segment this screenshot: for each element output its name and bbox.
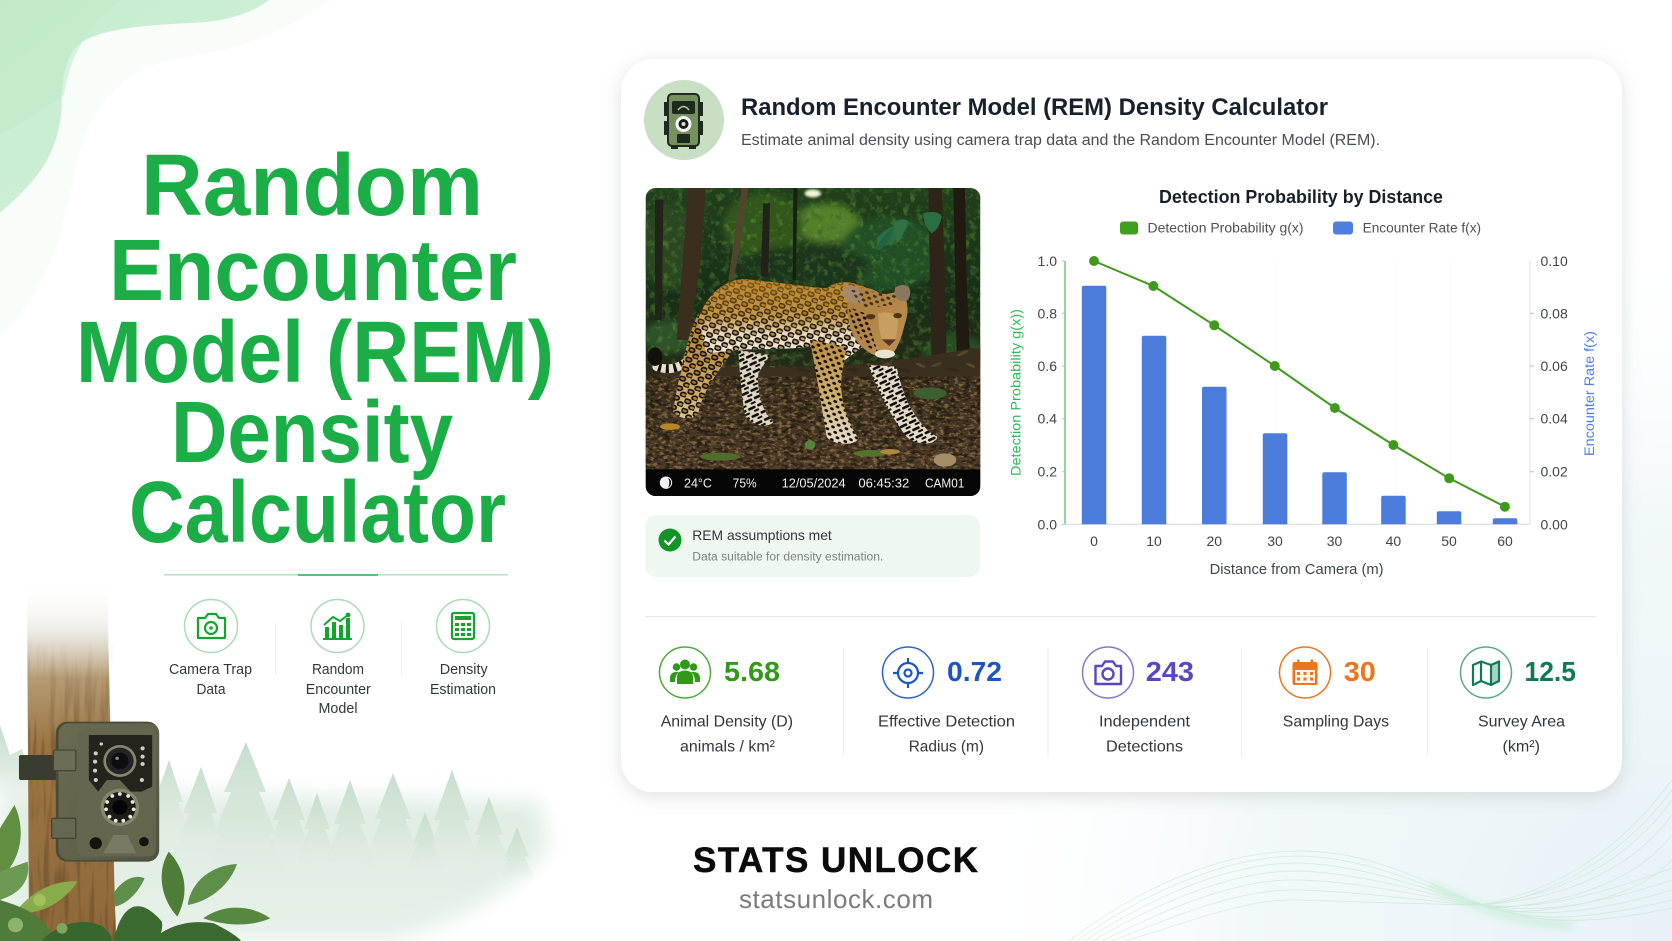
chart axes (1062, 261, 1534, 524)
far hind leg (738, 350, 773, 426)
icon: target (893, 658, 923, 688)
infrared lens ring (101, 789, 139, 826)
x axis labels: 40 (1386, 533, 1401, 549)
stat: effective detection radius: 0.72 (947, 656, 1002, 687)
step: camera trap data: Data (196, 681, 226, 698)
leopard (648, 279, 937, 444)
x axis labels (1090, 533, 1513, 549)
head (847, 287, 908, 358)
icon: calendar (1292, 660, 1318, 685)
step: random encounter model: Random (312, 661, 364, 678)
callout: assumptions met: REM assumptions met (692, 527, 832, 543)
tail (652, 358, 684, 374)
icon: map (1473, 662, 1499, 685)
stat: effective detection radius: Radius (m) (909, 738, 984, 756)
stat: sampling days (1280, 647, 1389, 730)
x axis labels: 30 (1327, 533, 1342, 549)
left axis labels: 0.4 (1038, 411, 1057, 427)
x axis labels: 20 (1207, 533, 1222, 549)
stat: survey area: 12.5 (1524, 656, 1576, 687)
chart legend: Detection Probability g(x) (1148, 220, 1304, 236)
photo strip readings: 75% (733, 475, 757, 490)
chart legend: Encounter Rate f(x) (1363, 220, 1481, 236)
card heading: Random Encounter Model (REM) Density Calculator (741, 94, 1328, 121)
right axis labels: 0.06 (1540, 358, 1568, 374)
foreground leaves top right (877, 212, 942, 251)
x axis labels: 10 (1146, 533, 1162, 549)
forest backdrop (646, 188, 980, 496)
fir tree silhouettes (0, 725, 535, 881)
detection probability line (1089, 256, 1510, 512)
step: camera trap data (169, 600, 252, 698)
stat: survey area: (km²) (1502, 738, 1540, 756)
stat: independent detections: Detections (1106, 738, 1183, 756)
misty forest background (0, 725, 548, 941)
main title: Density (171, 384, 453, 481)
right axis labels: 0.10 (1540, 253, 1568, 269)
right axis labels: 0.08 (1540, 305, 1568, 321)
stat: effective detection radius (878, 647, 1015, 756)
brand name: STATS UNLOCK (693, 841, 978, 880)
left axis labels (1038, 253, 1057, 532)
stat: animal density: Animal Density (D) (661, 714, 793, 730)
photo strip readings: CAM01 (925, 475, 964, 490)
left axis labels: 0.6 (1038, 358, 1057, 374)
step: random encounter model: Model (318, 700, 358, 717)
photo data strip (646, 469, 980, 496)
right axis labels: 0.02 (1540, 464, 1568, 480)
stat: animal density (660, 647, 793, 756)
foreground leaves (0, 805, 270, 941)
main title: Random (141, 137, 483, 234)
stat: sampling days: 30 (1344, 656, 1376, 687)
camera trap photo (640, 188, 983, 496)
step: density estimation: Estimation (430, 681, 496, 698)
tree trunk with camera trap and leaves (0, 578, 270, 941)
step: density estimation: Density (440, 661, 488, 678)
card subtitle: Estimate animal density using camera trap data and the Random Encounter Model (REM). (741, 132, 1380, 149)
icon: camera trap badge (644, 80, 724, 160)
icon: check mark (658, 528, 682, 552)
icon: camera (1096, 662, 1121, 684)
tree trunks (655, 188, 970, 363)
main calculator card (621, 59, 1622, 792)
chart: detection probability by distance (1008, 186, 1597, 578)
camera trap (19, 722, 159, 862)
encounter rate bars (1082, 286, 1517, 524)
right axis title: Encounter Rate f(x) (1582, 331, 1597, 456)
right axis labels: 0.04 (1540, 411, 1568, 427)
step: random encounter model: Encounter (306, 681, 371, 698)
callout: assumptions met (645, 515, 980, 577)
left axis title: Detection Probability g(x)) (1008, 309, 1024, 476)
stat: animal density: 5.68 (724, 656, 780, 687)
photo strip readings: 06:45:32 (858, 475, 909, 490)
main title: Encounter (109, 222, 517, 319)
x axis labels: 50 (1441, 533, 1457, 549)
workflow steps (169, 600, 496, 717)
step: camera trap data: Camera Trap (169, 661, 252, 678)
body (698, 279, 870, 363)
step: random encounter model (306, 600, 371, 717)
decorative wave lines (1069, 780, 1672, 941)
leaf litter floor (646, 347, 980, 469)
stat: independent detections (1082, 647, 1194, 756)
callout: assumptions met: Data suitable for density estimation. (692, 552, 883, 564)
photo strip readings: 24°C (684, 475, 712, 490)
x axis labels: 0 (1090, 533, 1098, 549)
stat: independent detections: Independent (1099, 714, 1191, 730)
main title: Calculator (129, 464, 506, 561)
stat: animal density: animals / km² (680, 738, 776, 756)
far front leg (868, 365, 937, 444)
x axis title: Distance from Camera (m) (1210, 562, 1384, 578)
right axis labels (1540, 253, 1568, 532)
decorative mint blob top left (0, 0, 330, 335)
stat: survey area (1460, 647, 1576, 756)
brand website: statsunlock.com (739, 884, 933, 914)
stat: independent detections: 243 (1146, 656, 1194, 687)
right axis labels: 0.00 (1540, 516, 1568, 532)
stat: effective detection radius: Effective Detection (878, 714, 1015, 730)
chart legend (1120, 220, 1481, 236)
step: density estimation (430, 600, 496, 698)
near front leg (810, 340, 858, 444)
left axis labels: 0.8 (1038, 305, 1057, 321)
card header (644, 80, 1380, 160)
icon: people (670, 660, 700, 684)
main lens (103, 745, 136, 777)
main title (76, 137, 554, 561)
left axis labels: 1.0 (1038, 253, 1057, 269)
x axis labels: 30 (1267, 533, 1283, 549)
near hind leg (673, 313, 733, 418)
photo strip readings: 12/05/2024 (782, 475, 846, 490)
left axis labels: 0.2 (1038, 464, 1057, 480)
x axis labels: 60 (1497, 533, 1513, 549)
stat: survey area: Survey Area (1478, 714, 1565, 730)
chart title: Detection Probability by Distance (1159, 186, 1443, 207)
photo strip readings (660, 475, 964, 490)
stat: sampling days: Sampling Days (1283, 714, 1389, 730)
main title: Model (REM) (76, 304, 554, 401)
trunk (27, 578, 116, 941)
title divider (164, 574, 508, 576)
left axis labels: 0.0 (1038, 516, 1057, 532)
